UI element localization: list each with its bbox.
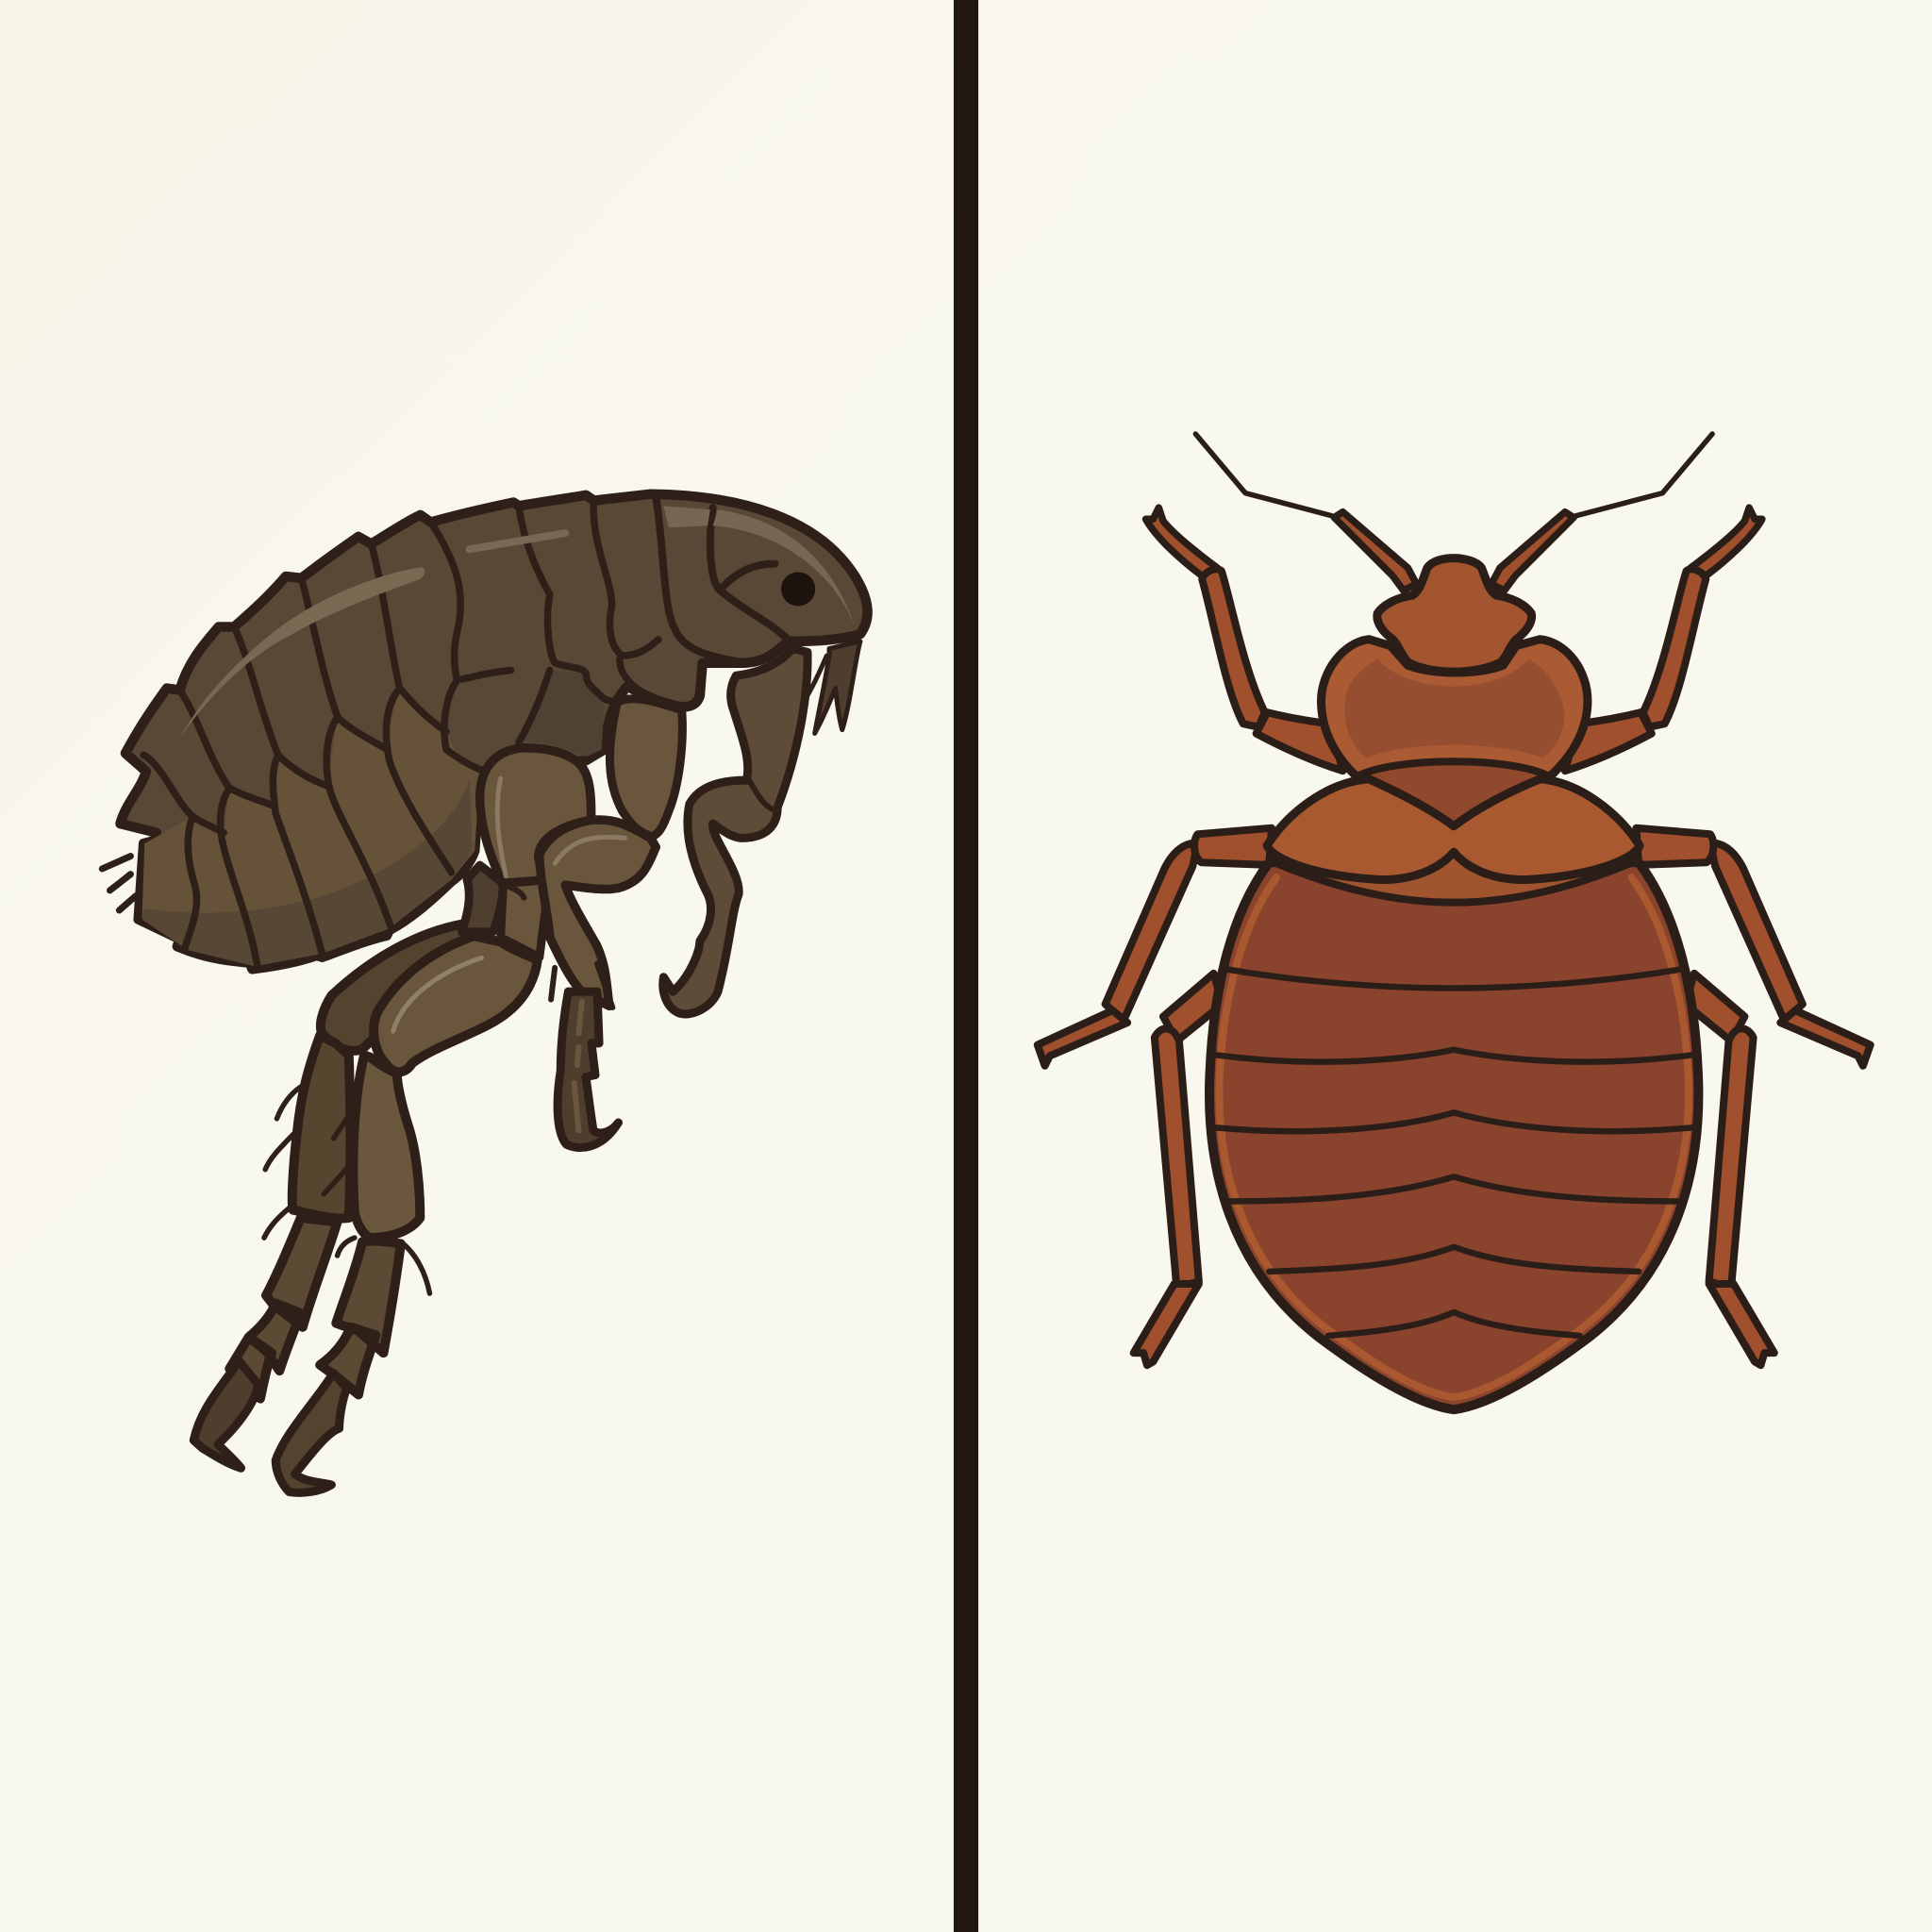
middle coxa (1637, 828, 1713, 865)
hind tibia (1155, 1028, 1199, 1288)
middle tarsus (558, 991, 618, 1148)
front femur (1257, 712, 1342, 771)
front tibia (1643, 569, 1706, 727)
scutellum triangle (1356, 761, 1551, 826)
hind coxa (1686, 974, 1744, 1041)
bed bug left side legs (1038, 434, 1417, 1365)
flea eye (781, 572, 815, 606)
flea abdomen segment lines (143, 523, 511, 833)
middle tibia (1710, 842, 1803, 1020)
flea lower segment lines (185, 689, 452, 966)
pronotum (1322, 640, 1588, 775)
middle and hind legs right (1637, 828, 1871, 1365)
back claw (193, 1361, 258, 1468)
front leg (663, 649, 808, 1014)
middle tarsus light stripes (575, 1002, 582, 1130)
middle tarsus (1038, 1010, 1127, 1066)
bed bug abdomen segments (1214, 969, 1694, 1336)
antenna whip (1195, 434, 1332, 516)
middle leg spurs (551, 964, 612, 1008)
antenna whip (1575, 434, 1712, 516)
flea mouth bristle (808, 656, 826, 695)
middle coxa (1194, 828, 1272, 865)
divider: vertical bar (954, 0, 978, 1932)
bed bug abdomen edge tint (1219, 877, 1689, 1397)
hind coxa (1163, 974, 1223, 1041)
antenna segment (1491, 512, 1574, 591)
coxa crease (501, 885, 524, 898)
hind trochanter light (501, 876, 550, 958)
back femur (321, 924, 478, 1051)
middle femur highlight (555, 837, 625, 863)
hind coxa (480, 748, 591, 883)
lower abdomen plates (142, 689, 480, 966)
thorax shadow (519, 670, 604, 757)
flea head plate lines (656, 497, 788, 661)
flea mouthparts (815, 641, 860, 733)
front femur highlight (393, 958, 482, 1031)
hind trochanter dark (462, 865, 503, 932)
hind tarsus (1709, 1284, 1774, 1365)
middle femur and tibia (540, 820, 656, 1006)
front claw (275, 1373, 347, 1492)
bed bug wing pads (1267, 779, 1640, 880)
back tibia (292, 1035, 350, 1218)
front femur (1565, 712, 1652, 771)
middle and hind legs left (1038, 828, 1272, 1365)
flea body group (102, 494, 868, 1014)
pronotum inner shade (1344, 658, 1564, 758)
hind tarsus (1134, 1284, 1199, 1365)
flea hind legs (193, 924, 478, 1492)
front tarsus segments (320, 1241, 401, 1394)
front tibia (1202, 569, 1265, 727)
flea front femur and middle tarsus (374, 936, 618, 1148)
front tibia (353, 1055, 420, 1238)
scutellum lower fill (1269, 838, 1638, 903)
front tarsus (1146, 508, 1217, 576)
front tarsus hairs (338, 1238, 429, 1293)
icon: flea (102, 494, 868, 1492)
icon: bed bug (1038, 434, 1871, 1409)
bed bug right side legs (1491, 434, 1871, 1365)
middle tarsus (1780, 1010, 1871, 1066)
flea back highlights (180, 567, 425, 739)
bed bug abdomen (1209, 862, 1698, 1409)
flea back highlight short (470, 533, 565, 549)
front tarsus (1690, 508, 1762, 576)
hind coxa highlight (497, 778, 506, 876)
flea thorax lines (519, 501, 684, 742)
antenna segment (1334, 512, 1417, 591)
front femur (374, 936, 538, 1072)
rear bristles (102, 857, 136, 910)
bed bug head (1377, 558, 1532, 672)
front leg joint line (749, 780, 773, 809)
flea head highlight (663, 506, 855, 627)
flea body silhouette (120, 494, 868, 969)
back tarsus segments (229, 1218, 338, 1399)
middle tibia (1106, 842, 1198, 1020)
middle coxa (609, 699, 682, 837)
back tibia hairs (264, 1087, 349, 1238)
hind tibia (1709, 1028, 1754, 1288)
belly shadow band (142, 778, 473, 966)
